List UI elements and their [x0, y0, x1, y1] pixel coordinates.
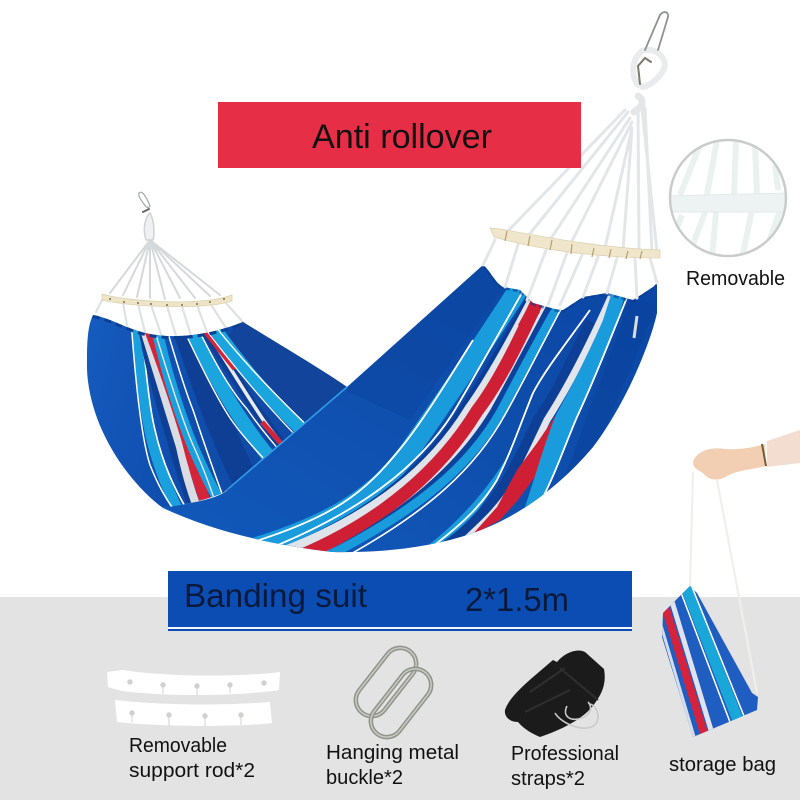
banner text: size: 2*1.5m — [465, 581, 569, 618]
inset detail circle: removable rod — [665, 140, 790, 258]
label: Removable: Removable — [686, 268, 785, 290]
heading text: Anti rollover — [312, 118, 492, 156]
item: hanging metal buckles — [326, 641, 459, 789]
grey lower background band — [0, 597, 800, 800]
hammock back section with stripes — [86, 315, 347, 508]
left spreader cords and hanging hook — [96, 192, 243, 339]
right spreader cords and hanging hook — [483, 12, 668, 305]
left wooden spreader bar — [102, 294, 232, 307]
item: removable support rods — [107, 670, 280, 782]
blue size banner — [168, 571, 632, 631]
storage bag with drawstring — [655, 472, 758, 740]
red heading banner — [218, 102, 581, 168]
label: professional straps: straps*2 — [511, 768, 585, 790]
label: professional straps: Professional — [511, 743, 619, 765]
label: removable support rod: support rod*2 — [129, 760, 255, 782]
banner text: Banding suit: Banding suit — [184, 577, 367, 614]
hammock front sheet with stripes — [163, 265, 660, 564]
label: hanging metal buckle: buckle*2 — [326, 767, 403, 789]
label: removable support rod: Removable — [129, 735, 227, 757]
right wooden spreader bar — [490, 228, 660, 259]
label: hanging metal buckle: Hanging metal — [326, 742, 459, 764]
hammock illustration — [80, 12, 668, 564]
label: storage bag: storage bag — [669, 754, 776, 776]
arm and hand holding bag — [693, 430, 800, 480]
item: professional straps — [505, 650, 619, 790]
